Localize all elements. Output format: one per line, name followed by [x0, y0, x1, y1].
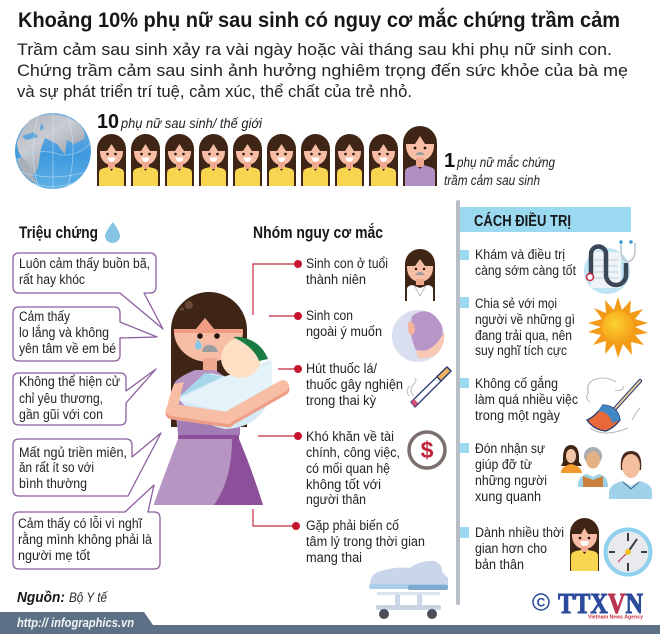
treatment item 5: Dành nhiều thời [475, 525, 564, 540]
bubble: symptom 2 [13, 307, 157, 361]
title: Khoảng 10% phụ nữ sau sinh có nguy cơ mắc chứng trầm cảm [18, 8, 620, 32]
illustration: mother holding baby [154, 292, 283, 505]
bubble: symptom 5: Cảm thấy có lỗi vì nghĩ [18, 516, 143, 531]
risk text 4: người thân [306, 492, 366, 507]
logo: TTXVN: C [537, 596, 546, 610]
treatment item 2 [460, 296, 575, 358]
icon: sun [588, 297, 648, 358]
treatment item 1: Khám và điều trị [475, 247, 565, 262]
treatment item 5: bản thân [475, 557, 524, 572]
treatment item 4: những người [475, 473, 547, 488]
treatment item 2: đang trải qua, nên [475, 328, 572, 343]
divider: treatment column rule [456, 200, 460, 605]
heading: treatment: CÁCH ĐIỀU TRỊ [474, 213, 571, 230]
man [621, 451, 641, 470]
icon: smiling woman [570, 518, 599, 571]
icon: globe [15, 113, 91, 189]
footer bar [0, 612, 660, 634]
arms [167, 382, 184, 408]
risk text 4: Khó khăn về tài [306, 429, 394, 444]
treatment item 2: suy nghĩ tích cực [475, 343, 567, 358]
younger woman [561, 445, 582, 466]
intro text block: Trầm cảm sau sinh xảy ra vài ngày hoặc vài tháng sau khi phụ nữ sinh con. [17, 41, 612, 59]
source [17, 589, 108, 606]
bubble: symptom 4: bình thường [19, 476, 87, 491]
bubble: symptom 1 [13, 253, 163, 329]
risk text 5: mang thai [306, 550, 362, 565]
icon: cigarette [407, 367, 451, 407]
label: 1 woman with depression [444, 150, 555, 188]
connector lines [253, 260, 302, 530]
baby blanket [178, 360, 272, 429]
risk text 3: thuốc gây nghiện [306, 377, 403, 392]
bubble: symptom 4: Mất ngủ triền miên, [19, 445, 127, 460]
mother dress [173, 370, 240, 435]
bubble: symptom 3: gần gũi với con [19, 407, 103, 422]
treatment item 4: giúp đỡ từ [475, 457, 532, 472]
risk text 3 [306, 361, 403, 408]
icon: money: $ [421, 437, 434, 463]
risk text 4: có mối quan hệ [306, 461, 390, 476]
treatment item 3: trong một ngày [475, 408, 560, 423]
bubble: symptom 2: yên tâm về em bé [19, 341, 116, 356]
risk text 5: tâm lý trong thời gian [306, 534, 425, 549]
treatment item 3: làm quá nhiều việc [475, 392, 578, 407]
treatment item 5: gian hơn cho [475, 541, 547, 556]
intro text block: Chứng trầm cảm sau sinh ảnh hưởng nghiêm trọng đến sức khỏe của bà mẹ [17, 62, 628, 80]
older woman [584, 447, 602, 465]
logo: TTXVN: Vietnam News Agency [588, 614, 643, 620]
label: 10 women [97, 111, 263, 133]
logo: TTXVN: TTXVN [558, 589, 643, 620]
risk text 1: Sinh con ở tuổi [306, 256, 388, 271]
bubble: symptom 2: lo lắng và không [19, 325, 109, 340]
icon: depressed woman [403, 126, 437, 186]
risk text 4: chính, công việc, [306, 445, 400, 460]
treatment item 2: người về những gì [475, 312, 575, 327]
label: 1 woman with depression: 1 [444, 150, 455, 172]
bubble: symptom 1: rất hay khóc [19, 272, 85, 287]
source: Bộ Y tế [69, 589, 108, 605]
treatment item 2: Chia sẻ với mọi [475, 296, 557, 311]
label: 1 woman with depression: trầm cảm sau sinh [444, 173, 540, 188]
treatment item 4: xung quanh [475, 489, 541, 504]
risk text 5: Gặp phải biến cố [306, 518, 399, 533]
treatment item 1 [460, 247, 576, 278]
icon: water drop [105, 222, 120, 243]
heading: treatment [460, 207, 631, 232]
bubble: symptom 5: người mẹ tốt [18, 548, 90, 563]
bubble: symptom 5: rằng mình không phải là [18, 532, 152, 547]
icon: clock [606, 530, 650, 574]
icon: hospital bed [369, 561, 448, 619]
icon row: nine healthy women [97, 134, 398, 186]
treatment item 4 [460, 441, 547, 504]
risk text 4 [306, 429, 400, 507]
heading: symptoms: Triệu chứng [19, 224, 98, 242]
heading: risk groups: Nhóm nguy cơ mắc [253, 223, 383, 242]
bubble: symptom 3: Không thể hiện cử [19, 374, 120, 389]
risk text 3: trong thai kỳ [306, 393, 376, 408]
bubble: symptom 4: ăn rất ít so với [19, 460, 94, 475]
treatment item 5 [460, 525, 564, 572]
bubble: symptom 3: chỉ yêu thương, [19, 391, 103, 406]
label: 10 women: 10 [97, 111, 119, 133]
risk text 4: không tốt với [306, 477, 381, 492]
bubble: symptom 4 [13, 433, 161, 496]
label: 10 women: phụ nữ sau sinh/ thế giới [120, 116, 263, 131]
icon: money [409, 432, 445, 468]
treatment item 1: càng sớm càng tốt [475, 263, 576, 278]
bubble: symptom 5 [13, 485, 160, 569]
intro text block [17, 41, 628, 101]
mother face [174, 318, 243, 362]
baby head [221, 338, 261, 378]
treatment item 3: Không cố gắng [475, 376, 558, 391]
source: Nguồn: [17, 589, 65, 606]
bubble: symptom 2: Cảm thấy [19, 309, 70, 324]
bubble: symptom 3 [13, 369, 156, 425]
risk text 2 [306, 308, 382, 339]
treatment item 4: Đón nhận sự [475, 441, 545, 456]
intro text block: và sự phát triển trí tuệ, cảm xúc, thể chất của trẻ nhỏ. [17, 83, 412, 101]
risk text 5 [306, 518, 425, 565]
risk text 3: Hút thuốc lá/ [306, 361, 377, 376]
risk text 2: Sinh con [306, 308, 353, 323]
risk text 1 [306, 256, 388, 287]
icon: supportive people [561, 445, 652, 499]
label: 1 woman with depression: phụ nữ mắc chứng [456, 155, 555, 170]
risk text 1: thành niên [306, 272, 366, 287]
risk text 2: ngoài ý muốn [306, 324, 382, 339]
icon: pregnant belly [392, 310, 444, 362]
bubble: symptom 1: Luôn cảm thấy buồn bã, [19, 256, 150, 271]
mother hair [171, 292, 247, 427]
icon: stethoscope [584, 240, 635, 294]
icon: broom and dust [587, 378, 640, 433]
footer bar: http:// infographics.vn [17, 615, 134, 630]
treatment item 3 [460, 376, 578, 423]
icon: teenage mother [405, 249, 435, 301]
